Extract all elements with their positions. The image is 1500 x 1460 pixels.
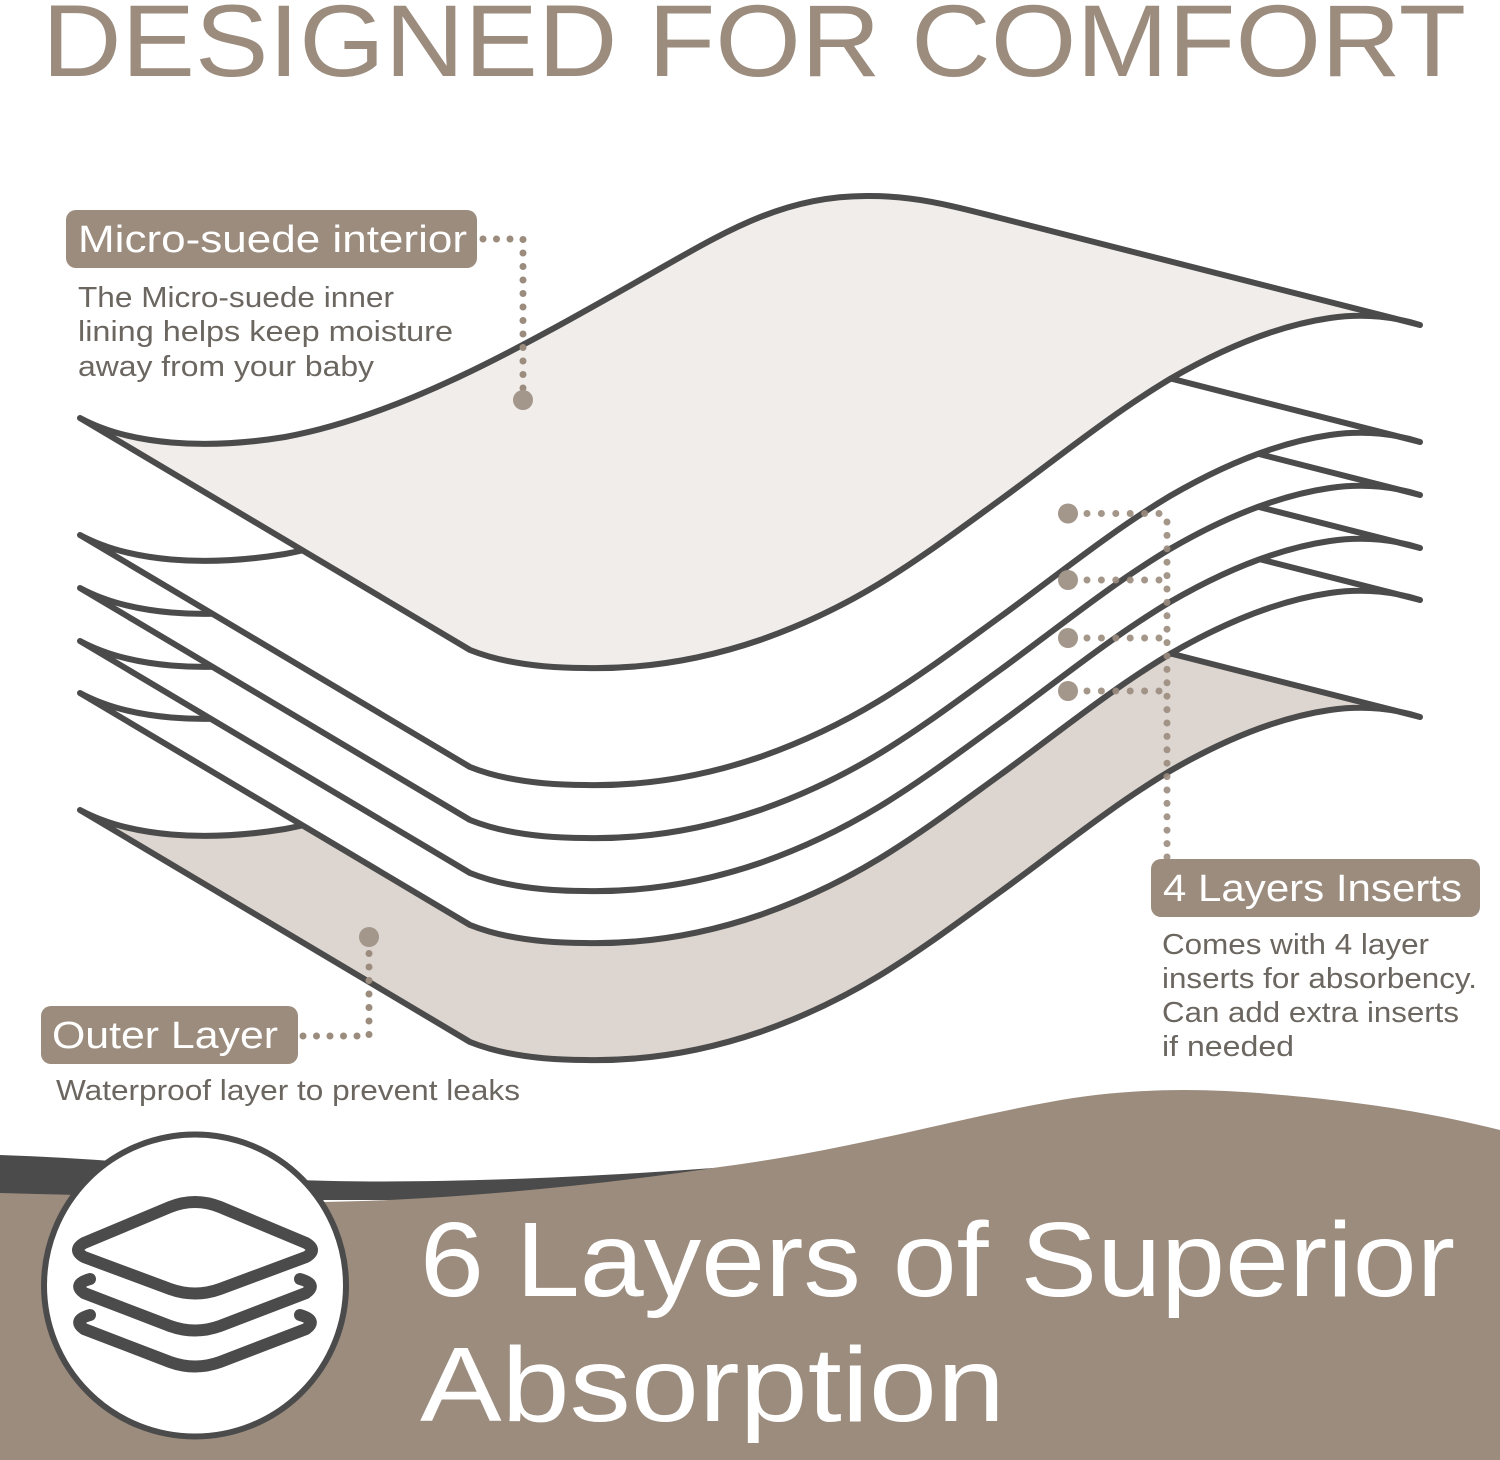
label text: 4 Layers Inserts xyxy=(1163,868,1462,910)
description: if needed xyxy=(1162,1031,1294,1063)
layer: insert 1 xyxy=(80,313,1420,785)
brown wave xyxy=(0,1090,1500,1460)
leader dots xyxy=(1058,504,1078,701)
icon: stacked layers in circle xyxy=(44,1134,346,1436)
layer: insert 4 xyxy=(80,471,1420,943)
leader dot xyxy=(513,390,533,410)
description: lining helps keep moisture xyxy=(78,316,453,348)
layer: outer waterproof layer xyxy=(80,588,1420,1060)
leader dot xyxy=(359,927,379,947)
description: The Micro-suede inner xyxy=(78,282,394,314)
dark swoosh xyxy=(0,1155,740,1200)
callout: 4 layers inserts xyxy=(1058,504,1480,1063)
callout: micro-suede interior xyxy=(66,210,533,410)
description xyxy=(1162,929,1477,1063)
label pill xyxy=(66,210,477,268)
bottom banner xyxy=(0,1090,1500,1460)
dotted leader xyxy=(303,945,369,1036)
banner heading xyxy=(420,1201,1455,1444)
label text: Outer Layer xyxy=(52,1015,278,1057)
label text: Micro-suede interior xyxy=(78,219,467,261)
description: Comes with 4 layer xyxy=(1162,929,1429,961)
layered diagram xyxy=(80,196,1420,1060)
layer: micro-suede interior xyxy=(80,196,1420,668)
banner heading: Absorption xyxy=(420,1326,1005,1444)
description: Waterproof layer to prevent leaks xyxy=(56,1075,520,1107)
layer: insert 3 xyxy=(80,419,1420,891)
description: inserts for absorbency. xyxy=(1162,963,1477,995)
description xyxy=(78,282,453,383)
callout: outer layer xyxy=(41,927,520,1107)
label pill xyxy=(1151,859,1480,917)
banner heading: 6 Layers of Superior xyxy=(420,1201,1455,1319)
label pill xyxy=(41,1006,298,1064)
dotted leaders xyxy=(1087,514,1167,858)
description: Can add extra inserts xyxy=(1162,997,1459,1029)
layer: insert 2 xyxy=(80,366,1420,838)
description: away from your baby xyxy=(78,351,375,383)
dotted leader xyxy=(483,239,523,396)
